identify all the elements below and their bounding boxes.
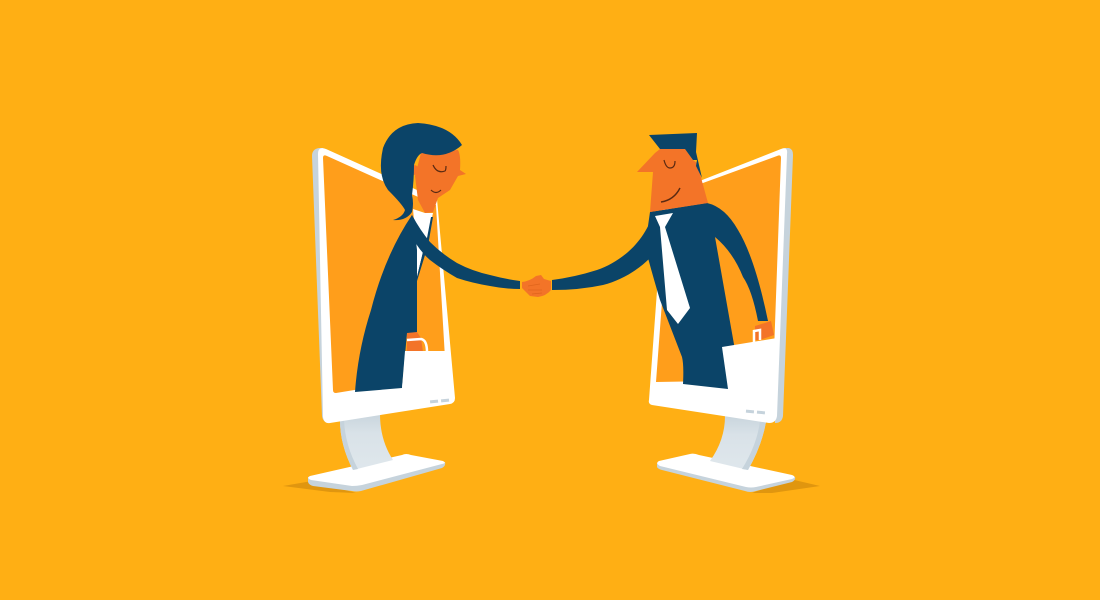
woman lapel xyxy=(417,217,433,281)
man suit body and arm xyxy=(648,203,768,389)
woman briefcase handle xyxy=(407,339,427,352)
man mouth xyxy=(661,188,680,202)
handshake xyxy=(522,275,551,297)
man briefcase handle xyxy=(754,330,760,342)
woman suit body xyxy=(355,215,425,392)
woman xyxy=(355,123,520,392)
woman hand on briefcase xyxy=(407,332,423,352)
woman hair xyxy=(381,123,462,220)
man arm xyxy=(552,222,650,290)
woman shirt xyxy=(413,209,433,277)
woman face xyxy=(415,150,466,213)
woman ear xyxy=(409,165,419,175)
man tie xyxy=(655,213,690,324)
left monitor xyxy=(283,148,455,493)
man face xyxy=(637,149,708,212)
woman mouth xyxy=(431,190,441,192)
man briefcase xyxy=(722,338,777,395)
woman arm xyxy=(407,215,520,289)
right monitor xyxy=(649,148,820,493)
man eye xyxy=(664,160,675,168)
woman eye xyxy=(433,165,446,172)
man hair xyxy=(649,133,702,178)
man hand on briefcase xyxy=(755,321,774,340)
woman briefcase xyxy=(402,351,449,392)
man xyxy=(552,133,777,395)
